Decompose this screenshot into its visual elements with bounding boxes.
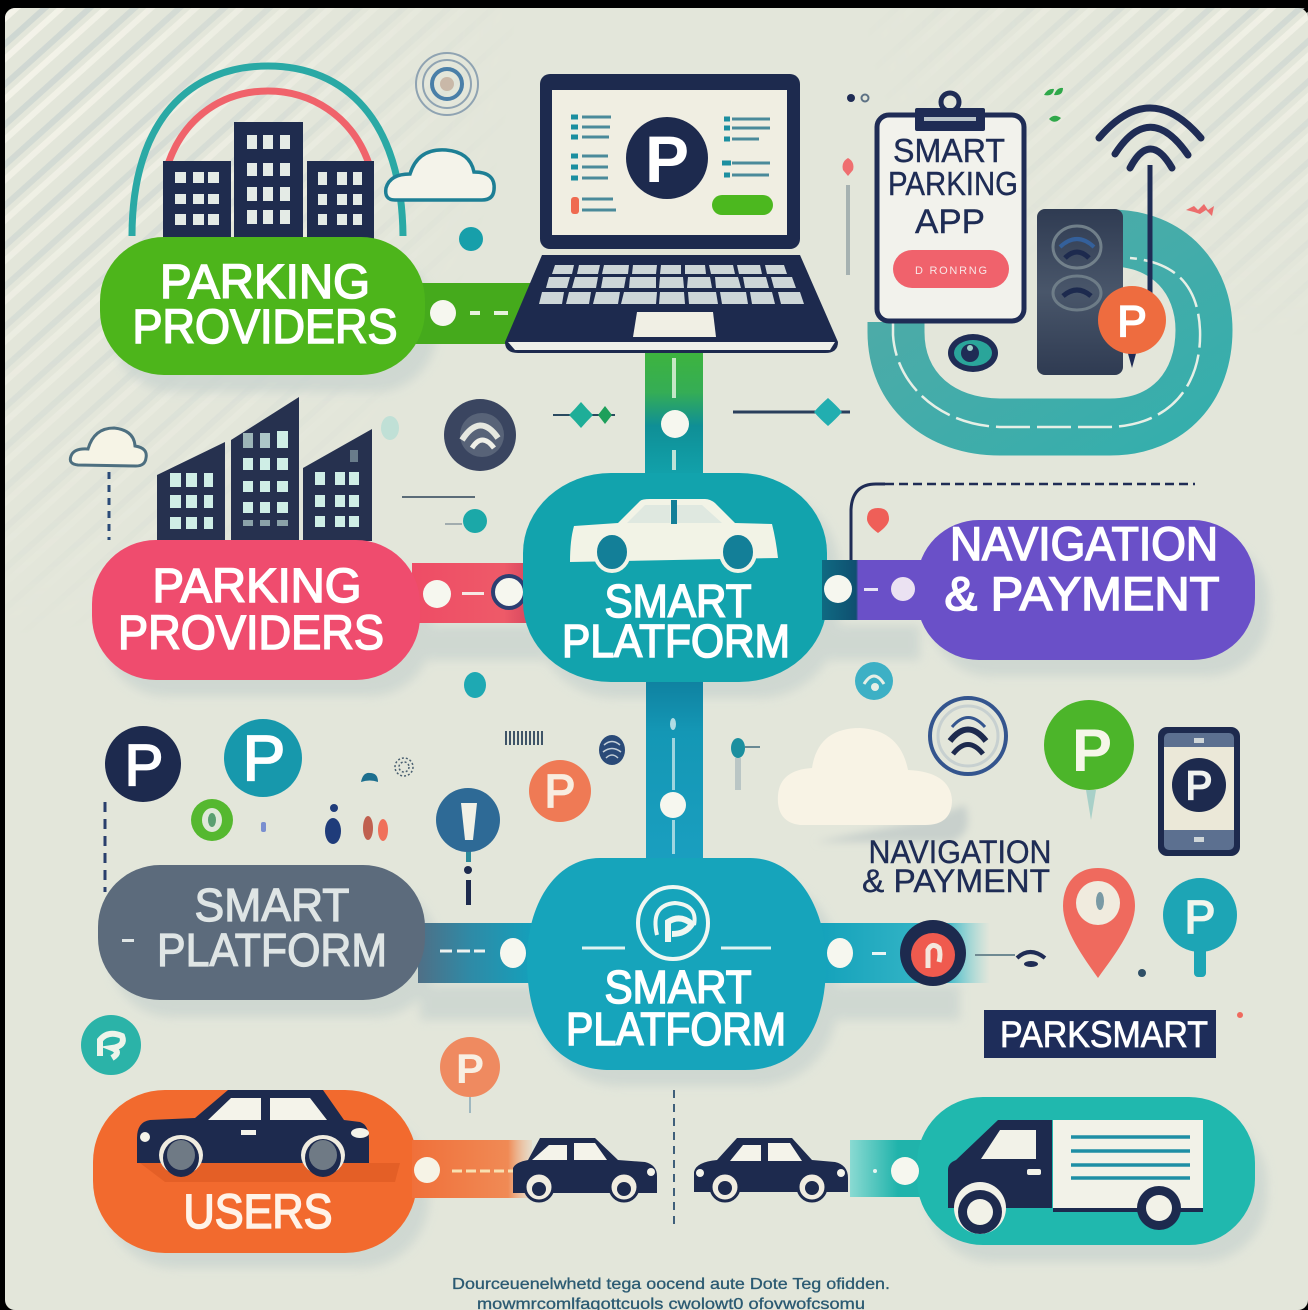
icon: P badge teal: P: [243, 722, 285, 794]
icon: red location pin: [1063, 868, 1135, 978]
text: navigation and payment navy: [862, 834, 1052, 899]
icon: cloud left: [70, 428, 146, 540]
icon: dark sensor phone: [1037, 209, 1123, 375]
panel: smart platform gray pill: PLATFORM: [157, 924, 387, 976]
icon: orange P pin: [1098, 286, 1166, 368]
icon: eye badge: [948, 334, 998, 372]
footer caption: [452, 1276, 890, 1310]
icon: wifi badge: [444, 399, 516, 471]
small decorations top right: [843, 88, 1214, 275]
screen lists: [571, 117, 770, 210]
icon: teal drop: [464, 672, 486, 698]
P badge on screen: P: [645, 122, 689, 196]
panel: navigation and payment purple pill: [917, 517, 1255, 660]
icon: small car left: [513, 1138, 657, 1201]
connector: laptop to smart platform: [645, 345, 703, 480]
connector: users to car: [412, 1140, 532, 1198]
panel: smart parking app clipboard: PARKING: [888, 165, 1018, 202]
icon: exclamation pin: [436, 788, 500, 905]
icon: orange P badge: [529, 760, 591, 822]
panel: parking providers green pill: [100, 237, 425, 375]
connector: providers to laptop: [415, 283, 530, 344]
panel: smart platform gray pill: SMART: [194, 879, 350, 931]
icon: truck: [948, 1120, 1203, 1234]
panel: parking providers pink pill: PARKING: [152, 560, 362, 613]
icon: city buildings left: [157, 397, 372, 541]
icon: teal P pin: P: [1185, 891, 1215, 943]
icon: small teal ring: [855, 662, 893, 700]
icon: cloud top: [386, 150, 494, 200]
panel: smart platform central bottom: PLATFORM: [566, 1003, 786, 1055]
icon: target: [416, 53, 478, 115]
panel: parking providers pink pill: PROVIDERS: [118, 607, 384, 660]
icon: phone with P: [1158, 727, 1240, 856]
icon: white car: [570, 499, 778, 571]
dashed route with pin: [851, 484, 1195, 560]
connector: pink providers to platform: [412, 563, 527, 623]
green button on screen: [712, 195, 773, 215]
keyboard base: [505, 255, 838, 353]
panel: smart parking app clipboard: APP: [915, 203, 985, 241]
icon: P badge navy: [105, 726, 181, 802]
icon: cream cloud: [778, 728, 968, 842]
panel: users orange pill: [93, 1090, 417, 1253]
panel: smart parking app clipboard: [877, 93, 1024, 321]
text: navigation and payment navy: NAVIGATION: [868, 834, 1052, 870]
icon: wifi antenna: [1099, 108, 1201, 300]
connector: gray pill to platform: [418, 923, 533, 983]
panel: smart platform central top: PLATFORM: [562, 615, 790, 667]
icon: green ring badge: [191, 799, 233, 841]
panel: navigation and payment purple pill: & PAYMENT: [944, 567, 1220, 620]
red button: D RONRNG: [915, 265, 987, 277]
text: navigation and payment navy: & PAYMENT: [862, 863, 1050, 899]
panel: smart platform central top: [523, 473, 827, 682]
clipboard clip: [915, 93, 985, 131]
panel: smart platform central top: SMART: [604, 575, 752, 627]
icon: P badge teal: [224, 719, 302, 797]
icon: green P badge: P: [1072, 717, 1112, 784]
icon: P badge navy: P: [125, 733, 163, 798]
icon: teal P small badge: [81, 1015, 141, 1075]
soft shadows under shapes: [104, 258, 1269, 1268]
small signal sparklines: [381, 398, 850, 533]
panel: users orange pill: USERS: [184, 1186, 332, 1239]
icon: small car right: [694, 1138, 848, 1201]
panel: navigation and payment purple pill: NAVIGATION: [950, 517, 1218, 570]
small wifi mark: [1017, 952, 1243, 1018]
icon: green P badge: [1044, 700, 1134, 820]
panel: smart platform central bottom: [527, 858, 826, 1070]
icon: phone with P: P: [1186, 764, 1212, 808]
connector: platform to navigation: [822, 560, 932, 620]
arches over city: [132, 66, 403, 236]
panel: parking providers green pill: PARKING: [160, 256, 370, 309]
icon: wifi ring: [930, 698, 1006, 774]
icon: navy red badge: [900, 920, 966, 986]
label: parksmart: PARKSMART: [1000, 1014, 1208, 1055]
icon: teal P pin: [1163, 878, 1237, 977]
panel: smart parking app clipboard: SMART: [893, 132, 1005, 169]
connector dot: [891, 1157, 919, 1185]
connector: platform to platform vertical: [646, 675, 703, 865]
connector: platform to right: [820, 923, 1015, 983]
icon: orange P pin small: [440, 1037, 500, 1113]
icon: orange P pin small: P: [456, 1045, 484, 1092]
icon: ring P: [638, 887, 708, 959]
panel: parking providers pink pill: [92, 540, 420, 680]
panel: truck teal pill: [891, 1097, 1255, 1245]
icon: orange P badge: P: [545, 765, 575, 817]
P badge on screen: [626, 117, 708, 199]
connector: cars to truck: [850, 1140, 930, 1197]
icon: small teal dot: [459, 227, 483, 251]
icon: orange P pin: P: [1117, 297, 1147, 346]
small scattered marks: [105, 735, 760, 892]
footer caption: Dourceuenelwhetd tega oocend aute Dote Teg ofidden.: [452, 1276, 890, 1293]
icon: laptop: [505, 74, 838, 353]
icon: city buildings top: [163, 122, 374, 239]
road loop: [893, 238, 1204, 427]
center dashed line and road marks: [515, 1090, 845, 1225]
panel: smart platform gray pill: [98, 865, 425, 1000]
red button: [893, 250, 1009, 288]
panel: smart platform central bottom: SMART: [604, 961, 752, 1013]
icon: navy car: [137, 1090, 369, 1177]
panel: parking providers green pill: PROVIDERS: [132, 301, 398, 354]
